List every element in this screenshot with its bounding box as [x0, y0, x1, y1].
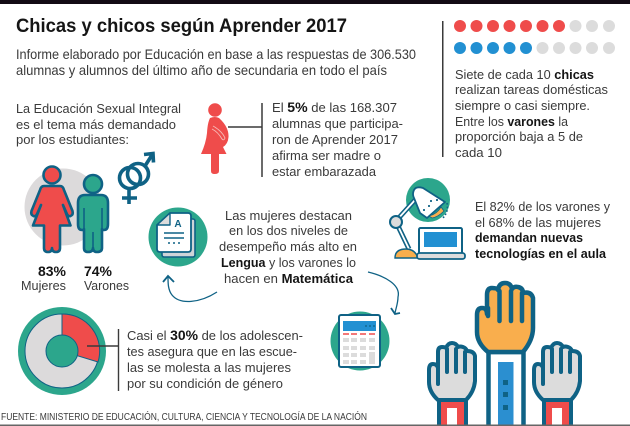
center sleeve	[488, 352, 524, 426]
text: new technologies: tecnologías en el aula	[475, 246, 607, 261]
grey circle behind figures	[24, 168, 102, 246]
text: language and math	[219, 208, 357, 286]
icon: man	[78, 175, 108, 252]
intro text	[16, 46, 416, 78]
stat: men 74%	[84, 263, 129, 293]
text: 5 percent: estar embarazada	[272, 164, 377, 179]
text: 5 percent: alumnas que participa-	[272, 116, 403, 131]
text: housework: Siete de cada 10 chicas	[455, 67, 594, 82]
icon: raised hands	[429, 283, 580, 426]
text: sexual education	[16, 101, 181, 147]
text: housework	[455, 67, 608, 160]
intro text: Informe elaborado por Educación en base a las respuestas de 306.530	[16, 46, 416, 62]
stat: women 83%: 83%	[38, 263, 67, 279]
text: new technologies: el 68% de las mujeres	[475, 215, 601, 230]
text: new technologies: El 82% de los varones y	[475, 199, 610, 214]
text: 5 percent: El 5% de las 168.307	[272, 99, 397, 115]
top black bar	[0, 0, 630, 4]
connector: pregnant woman	[228, 103, 262, 177]
text: new technologies: demandan nuevas	[475, 230, 583, 245]
icon: lamp and laptop	[390, 178, 465, 259]
text: sexual education: por los estudiantes:	[16, 132, 129, 147]
stat: men 74%: 74%	[84, 263, 113, 279]
chart: donut 30 percent	[18, 307, 106, 395]
text: housework: siempre o casi siempre.	[455, 98, 590, 113]
text: housework: realizan tareas domésticas	[455, 82, 608, 97]
stat: women 83%	[21, 263, 67, 293]
intro text: alumnas y alumnos del último año de secundaria en todo el país	[16, 62, 387, 78]
stat: men 74%: Varones	[84, 278, 129, 293]
dots: girls 7 of 10	[454, 20, 615, 32]
text: 5 percent: ron de Aprender 2017	[272, 132, 398, 147]
text: language and math: desempeño más alto en	[219, 239, 357, 254]
icon: woman	[31, 166, 73, 252]
text: language and math: Las mujeres destacan	[225, 208, 352, 223]
divider: top right	[442, 21, 444, 157]
text: language and math: en los dos niveles de	[229, 223, 348, 238]
connector: donut	[87, 329, 118, 391]
arrow: to calculator	[368, 272, 400, 314]
source note: FUENTE: MINISTERIO DE EDUCACIÓN, CULTURA, CIENCIA Y TECNOLOGÍA DE LA NACIÓN	[1, 410, 367, 423]
text: sexual education: es el tema más demandado	[16, 117, 176, 132]
text: 30 percent: Casi el 30% de los adolescen-	[127, 327, 303, 343]
text: housework: proporción baja a 5 de	[455, 129, 583, 144]
text: 30 percent: tes asegura que en las escue-	[127, 344, 297, 359]
text: housework: cada 10	[455, 145, 502, 160]
dots: boys 5 of 10	[454, 42, 615, 54]
text: 5 percent	[272, 99, 403, 179]
title: Chicas y chicos según Aprender 2017	[16, 16, 347, 37]
arrow: to document	[163, 276, 217, 301]
text: new technologies	[475, 199, 610, 261]
text: 30 percent: las se molesta a las mujeres	[127, 360, 291, 375]
icon: document	[148, 208, 208, 266]
text: sexual education: La Educación Sexual Integral	[16, 101, 181, 116]
text: housework: Entre los varones la	[455, 114, 569, 129]
left hand	[429, 343, 475, 400]
icon: pregnant woman	[201, 103, 229, 174]
stat: women 83%: Mujeres	[21, 278, 66, 293]
text: language and math: hacen en Matemática	[224, 271, 354, 286]
text: 30 percent: por su condición de género	[127, 376, 283, 391]
icon: document: A	[174, 219, 182, 230]
icon: gender symbol	[120, 154, 154, 204]
icon: calculator	[330, 312, 390, 370]
right hand	[534, 343, 580, 400]
left sleeve	[439, 400, 466, 426]
text: 30 percent	[127, 327, 303, 391]
bottom rule	[0, 424, 630, 426]
text: language and math: Lengua y los varones lo	[221, 255, 356, 270]
center hand	[477, 283, 533, 352]
text: 5 percent: afirma ser madre o	[272, 148, 381, 163]
right sleeve	[544, 400, 571, 426]
